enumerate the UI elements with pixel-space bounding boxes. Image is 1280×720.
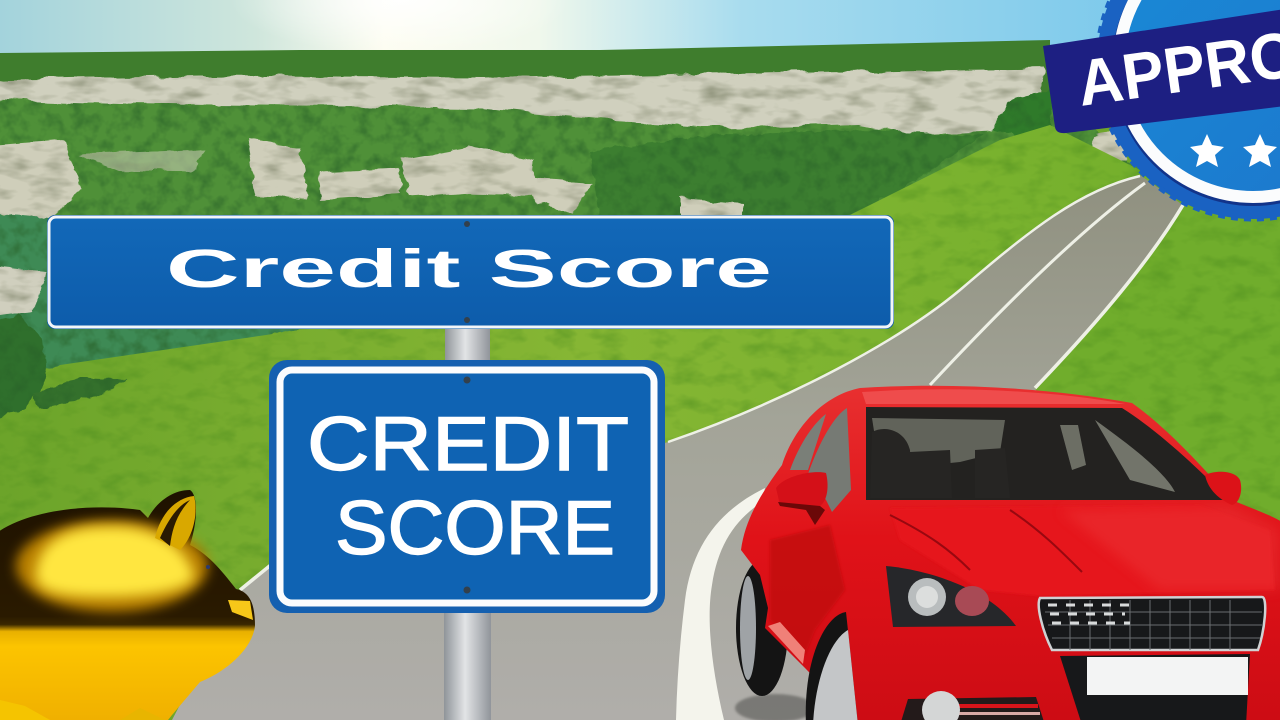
sign: lower CREDIT SCORE: SCORE [335,486,615,571]
license plate [1087,657,1248,695]
road markings [240,176,1183,590]
far forest [0,40,1050,100]
side sill highlight [768,622,805,664]
left mirror [776,472,828,506]
sign: top Credit Score: Credit Score [166,239,772,299]
sky [0,0,1280,60]
front wheel [806,612,858,720]
road edge stripe [676,488,765,720]
shrubs [32,378,125,408]
seats [870,429,1010,498]
lower sign pole [444,605,491,720]
windshield [866,407,1229,500]
main grass left of road [0,125,1160,720]
icon: red car [735,386,1280,720]
grille [1039,597,1265,720]
hood crease [890,510,1082,572]
headlight [886,566,1016,627]
pig highlight halo [16,520,208,612]
star right [1243,134,1277,167]
hillside forest [0,90,1140,300]
banner [1043,9,1280,133]
icon: gold piggy bank [0,490,255,720]
hood highlight [890,505,1275,596]
upright sign pole [445,325,490,365]
pig ear [155,496,196,550]
pig snout [228,600,253,620]
side windows [790,414,826,470]
door shading [770,525,845,655]
tree clump by road [990,90,1052,135]
mirror shadow [778,502,825,525]
hood sheen [1060,506,1280,590]
badge: APPROVED [1043,0,1280,219]
teal forest lower left [0,212,300,370]
right mirror [1205,472,1241,505]
sign: lower CREDIT SCORE: CREDIT [307,402,629,487]
rear wheel [736,560,788,696]
upper cliff band [0,68,1045,136]
right interior [1095,420,1175,492]
pig highlight [36,527,194,597]
lower-left cliff [0,266,47,318]
car body [741,386,1280,720]
sign: top Credit Score [47,215,894,329]
grass right of road [1000,205,1280,720]
badge seal [1097,0,1280,219]
tree [0,315,48,420]
road [172,175,1183,720]
star left [1190,134,1224,167]
sun glow [230,0,570,55]
car shadow [735,694,815,720]
rear window view [872,418,1005,470]
fog lamp [900,691,1045,720]
roof highlight [862,389,1125,404]
grille lights [1048,605,1130,623]
dark forest right [590,130,985,220]
side window front [808,408,851,512]
sign: lower CREDIT SCORE [269,360,665,613]
mid cliffs [0,130,1128,220]
